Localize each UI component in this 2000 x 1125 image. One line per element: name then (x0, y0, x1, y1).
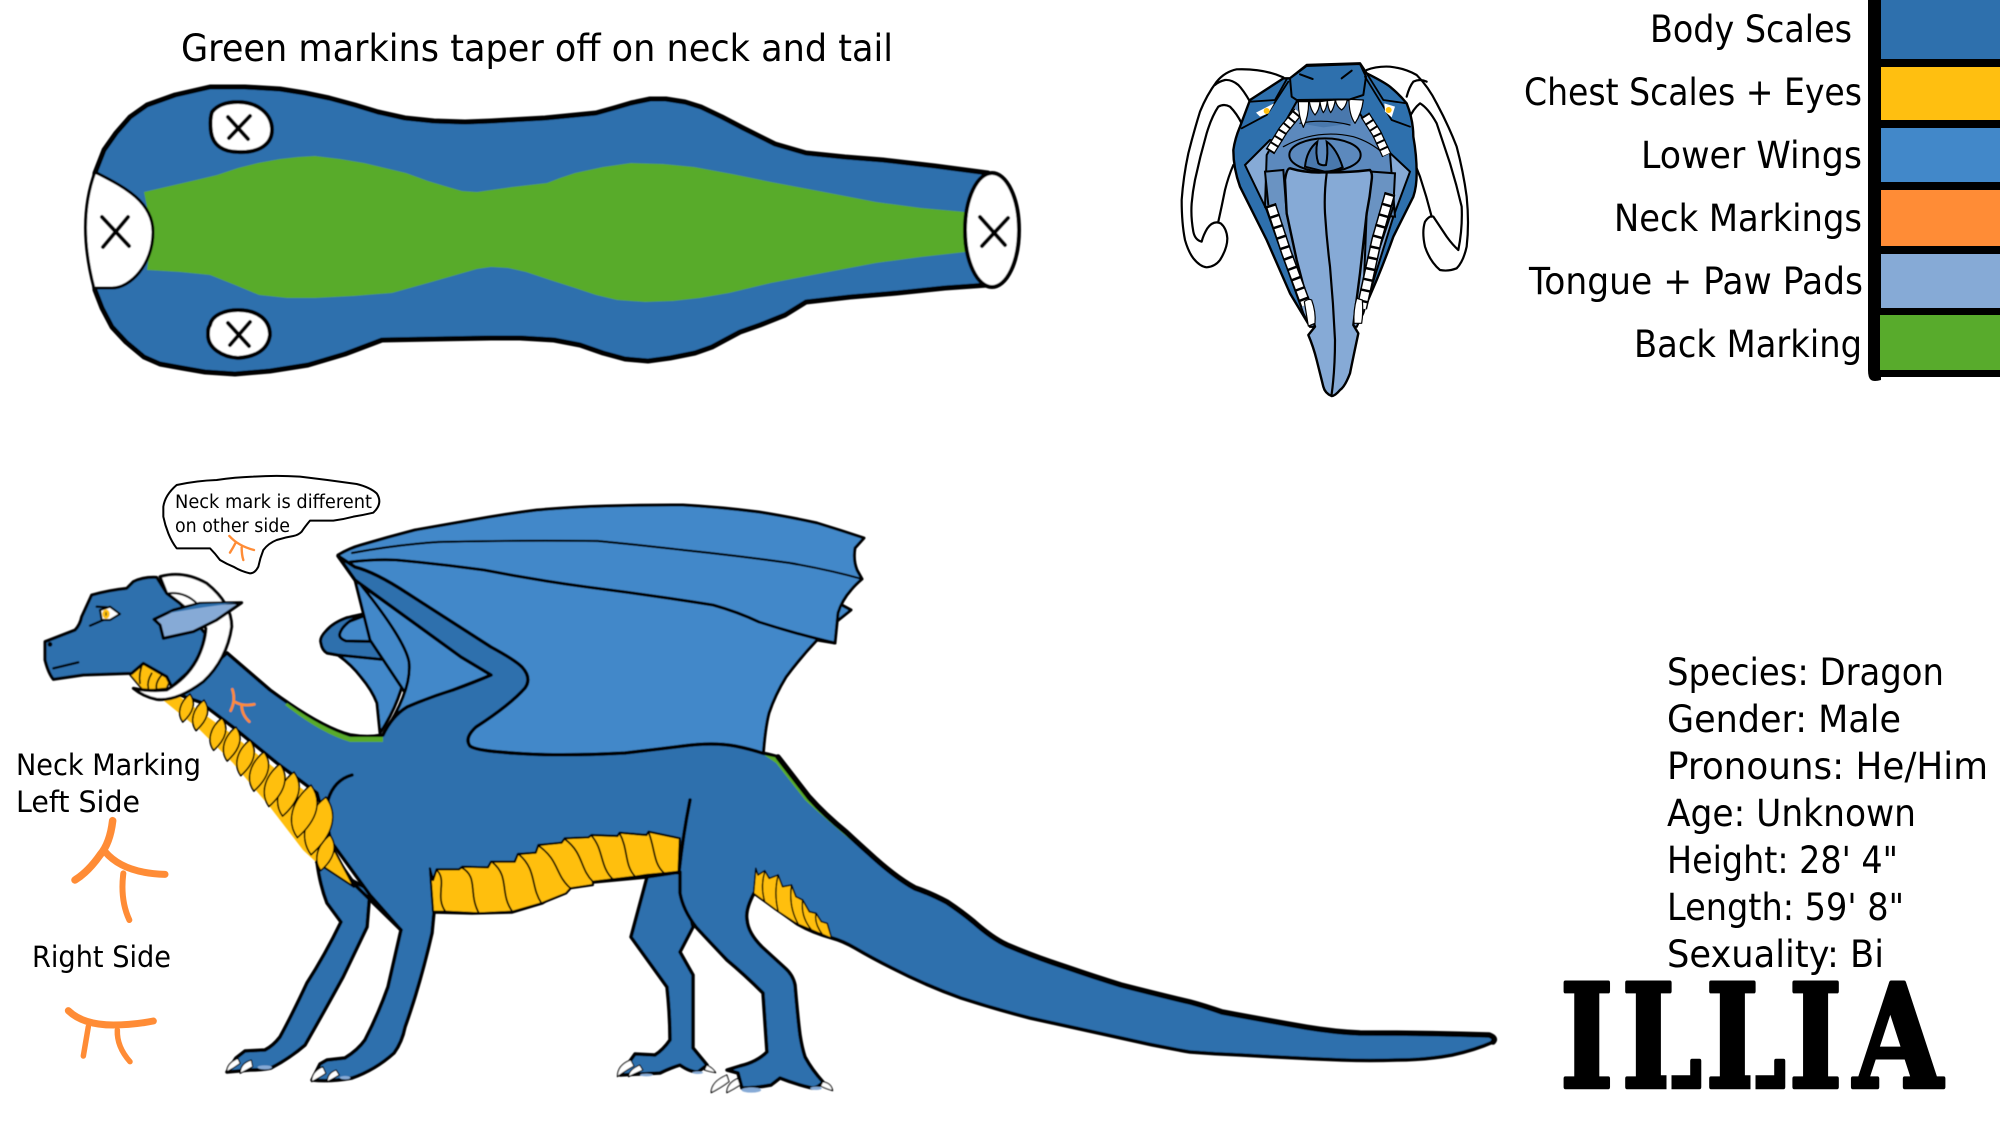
name stencil cuts (1669, 1060, 1753, 1092)
swatch: chest scales and eyes (1881, 67, 2000, 120)
tail base scales (754, 868, 832, 938)
legend frame (1868, 0, 2000, 381)
horn lines (1182, 67, 1468, 271)
text block: character stats: Height: 28' 4" (1667, 839, 1898, 882)
chest line (327, 775, 401, 930)
jaw scales (130, 662, 172, 691)
legend labels: Lower Wings (1641, 134, 1862, 177)
nostril (48, 642, 52, 647)
pupil (105, 612, 107, 616)
text: neck marking label: Left Side (16, 785, 140, 819)
head plane lines (1242, 73, 1410, 128)
legend labels: Back Marking (1634, 323, 1862, 366)
thick tail line (778, 757, 1494, 1042)
neck opening (85, 172, 153, 288)
text: neck marking label: Neck Marking (16, 748, 201, 782)
legend labels: Tongue + Paw Pads (1528, 260, 1863, 303)
x marks (102, 116, 1008, 346)
callout: neck mark speech bubble: on other side (175, 516, 290, 537)
horn inner arc (168, 593, 197, 603)
top view body shape (90, 87, 992, 374)
floor of the mouth (1245, 140, 1410, 327)
legend labels: Chest Scales + Eyes (1524, 71, 1862, 114)
title: character name: ILLIA (1560, 952, 1944, 1121)
upper teeth (1298, 99, 1363, 326)
legend: colour swatches (1524, 0, 2000, 381)
swatch: neck markings (1881, 190, 2000, 246)
head and horn (45, 574, 242, 700)
text block: character stats: Species: Dragon (1667, 651, 1944, 694)
bubble outline (163, 476, 379, 573)
body and tail (180, 556, 1494, 1088)
text: right side label: Right Side (32, 940, 171, 974)
ear (154, 603, 242, 638)
far wing (321, 611, 407, 733)
head shape (45, 577, 205, 687)
snout (1290, 64, 1366, 100)
palate (1265, 100, 1395, 217)
text block: character stats: Pronouns: He/Him (1667, 745, 1988, 788)
text block: character stats: Sexuality: Bi (1667, 933, 1884, 976)
throat (1289, 138, 1361, 172)
neck mark on body (231, 689, 254, 722)
swatch: tongue and paw pads (1881, 254, 2000, 308)
head base (1233, 63, 1417, 327)
illustration: front view of open mouth (1182, 63, 1468, 396)
icon: left side neck mark (75, 821, 165, 920)
text block: character stats (1667, 651, 1988, 976)
tooth rows (1270, 112, 1390, 308)
diagram: top view of dragon back (85, 87, 1019, 374)
bubble text: Neck mark is different (175, 492, 372, 513)
iris (102, 609, 110, 619)
legend labels: Neck Markings (1614, 197, 1862, 240)
near wing membrane (338, 505, 864, 775)
palate ridges (1283, 121, 1383, 153)
green marking on back (285, 703, 900, 880)
illustration: dragon side view (45, 505, 1494, 1093)
text: neck marking label (16, 748, 201, 819)
heading: top view note: Green markins taper off on neck and tail (181, 27, 893, 70)
bubble mark (229, 536, 254, 560)
white horn crescent (133, 574, 232, 700)
belly scales (430, 832, 680, 913)
epiglottis (1305, 142, 1343, 172)
text block: character stats: Age: Unknown (1667, 792, 1916, 835)
wing socket upper (210, 102, 272, 152)
tongue centre line (1325, 173, 1335, 394)
upper palate shade (1300, 102, 1352, 127)
swatch: lower wings (1881, 128, 2000, 182)
icon: right side neck mark (68, 1011, 153, 1062)
claws and paw pads (227, 1058, 833, 1093)
chest scales along neck (163, 694, 354, 887)
tail opening (965, 173, 1019, 287)
green back marking (144, 156, 970, 302)
eye (100, 607, 120, 620)
legend labels (1524, 8, 1863, 366)
face lines (53, 607, 107, 668)
jaw scale lines (140, 662, 162, 689)
nostrils (1300, 71, 1352, 79)
tongue (1285, 168, 1372, 396)
text block: character stats: Length: 59' 8" (1667, 886, 1904, 929)
ear upper band (167, 603, 237, 613)
eyes (1256, 103, 1395, 117)
hind thigh line (679, 800, 690, 872)
far front leg (227, 862, 370, 1072)
callout: neck mark speech bubble (163, 476, 379, 573)
swatch: back marking (1880, 315, 2000, 370)
text block: character stats: Gender: Male (1667, 698, 1901, 741)
swatch: body scales (1881, 0, 2000, 59)
tongue sides (1265, 170, 1307, 303)
far rear leg (620, 870, 707, 1075)
wing socket lower (208, 310, 270, 358)
legend labels: Body Scales (1650, 8, 1852, 51)
